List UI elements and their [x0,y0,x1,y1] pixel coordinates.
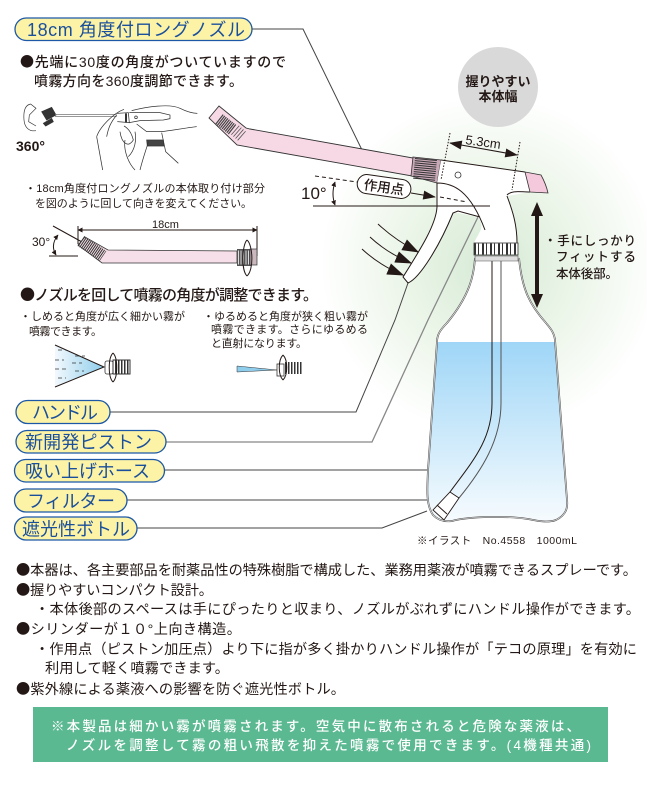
leader lines [110,29,478,528]
text: product features: ●シリンダーが１０°上向き構造。 [16,619,241,639]
text: loosen for narrow coarse mist: ・ゆるめると角度が狭く粗い霧が [203,309,368,323]
bottle with liquid [427,258,567,522]
dimension: 10 degree angle [301,176,490,206]
text: product features [16,560,640,699]
text: mounting note [25,181,265,210]
text: mounting note: ・18cm角度付ロングノズルの本体取り付け部分 [25,181,265,195]
pill: suction hose: 吸い上げホース [25,462,150,482]
text: tighten for wide fine mist [20,309,185,338]
text: fits the hand [544,233,636,281]
suction hose and filter [433,256,501,520]
text: product features: ●握りやすいコンパクト設計。 [16,580,213,600]
badge: easy-to-grip body width [458,47,538,127]
text: loosen for narrow coarse mist [203,309,368,350]
text: nozzle angle description: ●先端に30度の角度がついていますので [20,52,286,72]
dimension: 10 degree angle: 10° [301,184,327,203]
label: 360 degrees: 360° [16,138,45,154]
arrows: squeeze direction [362,224,418,275]
dimension: 5.3cm width: 5.3cm [465,132,502,152]
dimension: 5.3cm width [441,132,520,190]
illustration: wide spray [55,345,130,387]
text: nozzle angle description [20,52,286,89]
text: tighten for wide fine mist: ・しめると角度が広く細かい霧が [20,309,185,323]
text: product features: ・本体後部のスペースは手にぴったりと収まり、ノズルがぶれずにハンドル操作ができます。 [35,602,640,618]
pill: filter [14,489,127,512]
title pill: 18cm angled long nozzle: 18cm 角度付ロングノズル [27,20,245,40]
text: product features: ●紫外線による薬液への影響を防ぐ遮光性ボトル。 [16,679,345,699]
diagram: 18cm nozzle with 30 degree angle: 30° [32,235,50,249]
text: nozzle angle description: 噴霧方向を360度調節できます。 [34,73,243,89]
text: fits the hand: フィットする [556,250,636,264]
background glow [320,95,647,435]
text: product features: ・作用点（ピストン加圧点）より下に指が多く掛かりハンドル操作が「テコの原理」を有効に [35,642,637,658]
illustration: narrow spray [237,355,302,380]
text: loosen for narrow coarse mist: 噴霧できます。さらにゆるめる [211,323,368,336]
illustration: hand rotating nozzle [24,104,197,170]
badge: easy-to-grip body width: 握りやすい [465,74,531,89]
pill: handle: ハンドル [32,403,98,423]
text: tighten for wide fine mist: 噴霧できます。 [29,325,102,338]
pill: new piston: 新開発ピストン [25,432,152,452]
callout: point of action: 作用点 [363,177,405,198]
text: product features: ●本器は、各主要部品を耐薬品性の特殊樹脂で構成した、業務用薬液が噴霧できるスプレーです。 [16,560,637,580]
text: product features: 利用して軽く噴霧できます。 [45,661,229,677]
diagram: 18cm nozzle with 30 degree angle [32,219,257,276]
callout: point of action [356,173,435,200]
notice box [33,707,608,762]
sprayer head and trigger [403,160,548,283]
pill: light-blocking bottle: 遮光性ボトル [22,520,130,540]
caption: illustration model: ※イラスト No.4558 1000mL [417,535,577,547]
text: fits the hand: 本体後部。 [556,266,618,281]
text: mounting note: を図のように回して向きを変えてください。 [35,196,252,210]
pill: handle [16,400,110,424]
text: loosen for narrow coarse mist: と直射になります。 [211,336,307,350]
arrow: rear body height [531,202,543,308]
text: fits the hand: ・手にしっかり [544,233,636,248]
notice box: ノズルを調整して霧の粗い飛散を抑えた噴霧で使用できます。(4機種共通) [66,737,591,753]
heading: spray angle adjustable: ●ノズルを回して噴霧の角度が調整できます。 [20,284,318,305]
nozzle: pink angled tube [209,106,441,183]
badge: easy-to-grip body width: 本体幅 [478,89,518,104]
notice box: ※本製品は細かい霧が噴霧されます。空気中に散布されると危険な薬液は、 [51,718,580,734]
diagram: 18cm nozzle with 30 degree angle: 18cm [152,219,179,231]
pill: filter: フィルター [27,492,115,512]
